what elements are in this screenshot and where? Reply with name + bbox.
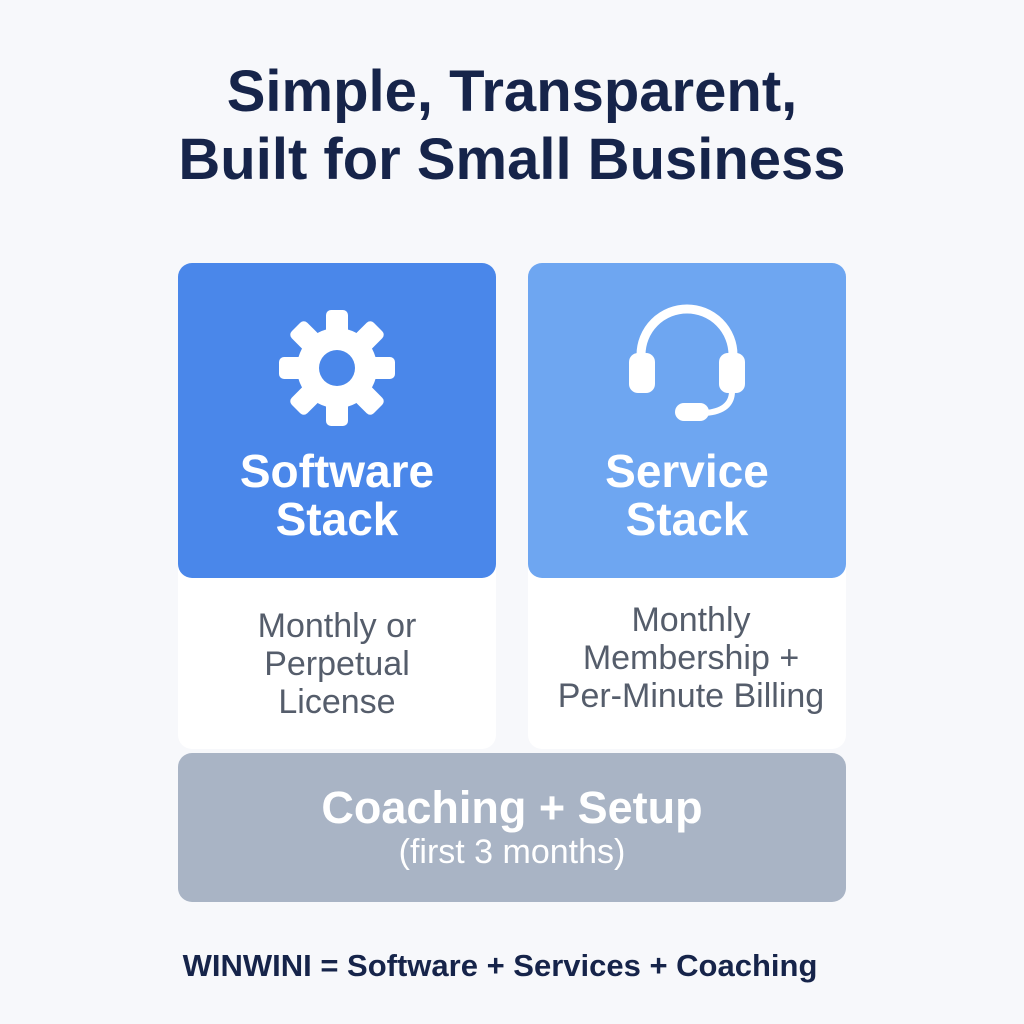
footer formula: WINWINI = Software + Services + Coaching (183, 948, 817, 983)
icon: headset (629, 304, 745, 421)
software label: Stack (276, 493, 398, 545)
software label: Software (240, 445, 434, 497)
title: Built for Small Business (178, 127, 846, 192)
service pricing text (558, 601, 824, 715)
software header (178, 263, 496, 578)
coaching subtext: (first 3 months) (399, 833, 625, 871)
service pricing text: Monthly (631, 601, 751, 639)
service pricing text: Per-Minute Billing (558, 677, 824, 715)
software label (240, 445, 434, 545)
panel: software stack (178, 263, 496, 749)
panel: service stack (528, 263, 846, 749)
software pricing text: License (278, 683, 396, 721)
service label: Service (605, 445, 769, 497)
panel: coaching + setup (178, 753, 846, 902)
software pricing text (258, 607, 416, 721)
title (178, 59, 846, 192)
service label (605, 445, 769, 545)
title: Simple, Transparent, (227, 59, 797, 124)
coaching heading: Coaching + Setup (321, 782, 703, 833)
service header (528, 263, 846, 578)
service label: Stack (626, 493, 748, 545)
service pricing text: Membership + (583, 639, 799, 677)
software pricing text: Monthly or (258, 607, 416, 645)
software pricing text: Perpetual (264, 645, 410, 683)
icon: gear (279, 310, 395, 426)
